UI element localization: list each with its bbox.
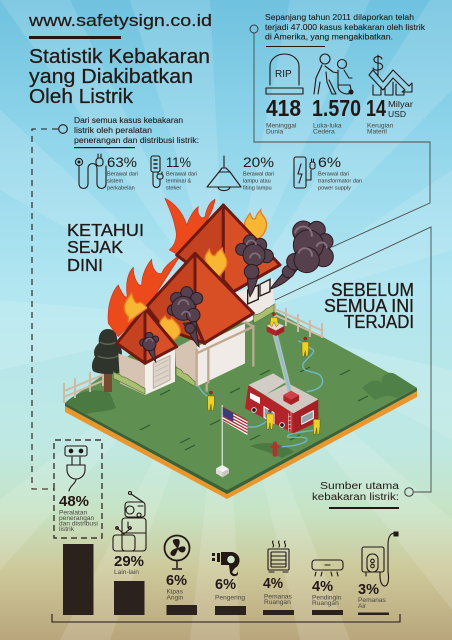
- stat: deaths: Meninggal: [266, 122, 297, 130]
- category 48% lighting: 48%: [59, 493, 89, 510]
- stat: deaths: 418: [266, 95, 301, 121]
- smoke on middle roof: [167, 287, 203, 347]
- category 29% others: Lain-lain: [114, 569, 139, 576]
- intro text: lighting and distribution: [74, 115, 199, 148]
- intro text: 2011 statistics: [265, 12, 426, 47]
- truck body: [245, 373, 318, 433]
- icon: air conditioner: [312, 560, 343, 576]
- fences: [64, 303, 323, 403]
- yellow flame on middle house: [160, 316, 180, 340]
- stat: financial loss: [366, 95, 413, 136]
- connector node: [250, 25, 258, 33]
- rear walls: [235, 278, 273, 323]
- intro text: 2011 statistics: Sepanjang tahun 2011 dilaporkan telah: [265, 12, 414, 22]
- hoses: [198, 341, 323, 447]
- main sources heading: Sumber utama: [320, 481, 400, 492]
- garage door: [153, 356, 170, 388]
- icon: hair dryer: [212, 552, 240, 576]
- stat: lamp 20%: [207, 154, 274, 192]
- isometric ground: [65, 310, 417, 499]
- smoke large right: [270, 221, 333, 289]
- title: yang Diakibatkan: [29, 66, 193, 88]
- title: Oleh Listrik: [29, 86, 134, 108]
- category 4% air conditioner: Ruangan: [312, 600, 339, 607]
- flag base: [216, 465, 229, 477]
- pergola: [197, 322, 253, 392]
- stat: wiring 63%: 63%: [107, 154, 137, 170]
- category 4% air conditioner: [312, 560, 343, 607]
- stat: terminal 11%: terminal &: [166, 178, 191, 184]
- stat: wiring 63%: [75, 154, 138, 192]
- smoke plumes: [140, 221, 333, 362]
- yellow flame back right: [245, 210, 267, 239]
- category 48% lighting: Peralatan: [59, 510, 88, 516]
- heading: before it happens: SEBELUM: [331, 279, 414, 300]
- stat: wiring 63%: Berawal dari: [107, 172, 138, 178]
- stat: transformer 6%: power supply: [318, 186, 351, 192]
- category 4% room heater: Ruangan: [264, 599, 291, 606]
- ladder base: [283, 391, 299, 405]
- category 6% fan: 6%: [166, 572, 187, 589]
- stat: financial loss: Kerugian: [367, 122, 394, 130]
- smoke on small roof: [140, 332, 159, 362]
- category 6% fan: [164, 536, 190, 602]
- category 4% room heater: [263, 541, 293, 606]
- category 48% lighting: listrik: [59, 526, 75, 533]
- house walls: [118, 353, 145, 395]
- stat: transformer 6%: [294, 154, 362, 192]
- category 6% hair dryer: Pengering: [215, 594, 245, 602]
- category 3% water heater: [358, 532, 398, 610]
- icon: heater: [268, 541, 289, 572]
- stat: transformer 6%: Berawal dari: [318, 172, 349, 178]
- icon: money loss: [369, 55, 412, 95]
- stat: wiring 63%: sistem: [107, 178, 124, 184]
- stat: deaths: Dunia: [266, 128, 284, 136]
- back flames: [108, 198, 215, 337]
- stat: financial loss: Materil: [367, 128, 387, 136]
- intro text: lighting and distribution: penerangan dan distribusi listrik:: [74, 135, 199, 145]
- dashed connector: [32, 125, 102, 538]
- category 6% fan: Angin: [166, 594, 184, 602]
- icon: tombstone: [266, 54, 303, 94]
- heading: before it happens: TERJADI: [344, 311, 414, 332]
- stat: financial loss: USD: [388, 110, 406, 119]
- rear roof: [177, 205, 280, 292]
- heading: before it happens: SEMUA INI: [324, 295, 414, 316]
- connector line: top right: [254, 33, 430, 247]
- stat: financial loss: 14: [366, 95, 386, 121]
- yellow flame left: [124, 293, 147, 322]
- category 3% water heater: Air: [358, 603, 367, 610]
- stat: injuries: [312, 95, 361, 136]
- yellow flame centre: [205, 248, 227, 277]
- icon: water heater: [362, 532, 398, 586]
- stat: transformer 6%: transformator dan: [318, 178, 362, 184]
- smoke upper centre: [236, 235, 273, 297]
- stat: injuries: Luka-luka: [313, 122, 342, 130]
- category 4% room heater: 4%: [263, 575, 283, 592]
- intro text: 2011 statistics: di Amerika, yang mengakibatkan.: [265, 32, 393, 42]
- heading underline: [29, 36, 121, 39]
- icon: plug and socket: [65, 446, 87, 491]
- icon: cable: [75, 154, 106, 188]
- intro text: lighting and distribution: listrik oleh peralatan: [74, 125, 152, 135]
- heading: know early: [67, 220, 144, 275]
- stat: injuries: 1.570: [312, 95, 361, 121]
- category 6% fan: Kipas: [166, 588, 184, 596]
- website url: www.safetysign.co.id: [28, 11, 212, 30]
- category 48% lighting: dan distribusi: [59, 520, 98, 528]
- bushes: [113, 304, 274, 394]
- flag pole: [222, 405, 223, 467]
- stat: lamp 20%: fiting lampu: [243, 186, 272, 192]
- category 48% lighting: penerangan: [59, 515, 95, 522]
- title: [29, 46, 210, 108]
- stat: wiring 63%: perkabelan: [107, 186, 135, 192]
- icon: caretaker and wheelchair: [314, 54, 353, 94]
- icon: radio fridge tv: [113, 492, 146, 551]
- ladder basket: [267, 322, 284, 336]
- main sources heading: kebakaran listrik:: [312, 492, 399, 503]
- heading: know early: KETAHUI: [67, 220, 144, 240]
- tree: [92, 329, 124, 392]
- category 4% air conditioner: Pendingin: [312, 594, 342, 602]
- connector line: right side: [275, 227, 431, 492]
- stat: deaths: [266, 95, 301, 136]
- heading: before it happens: [324, 279, 414, 332]
- category 4% air conditioner: 4%: [312, 578, 333, 595]
- category 3% water heater: Pemanas: [358, 597, 387, 604]
- icon: fan: [164, 536, 190, 569]
- heading: know early: SEJAK: [67, 237, 123, 257]
- stat: financial loss: Milyar: [388, 100, 413, 109]
- bar chart: [52, 544, 400, 622]
- stat: injuries: Cedera: [313, 128, 335, 136]
- icon: battery plug: [294, 157, 315, 188]
- category 6% hair dryer: 6%: [215, 576, 236, 593]
- heading: know early: DINI: [67, 255, 103, 275]
- firefighters: [208, 312, 320, 434]
- icon: socket: [151, 156, 163, 188]
- category 29% others: 29%: [114, 553, 144, 570]
- stat: terminal 11%: 11%: [166, 154, 191, 170]
- icon: tombstone: RIP: [275, 69, 292, 80]
- burning house: [108, 198, 333, 395]
- ladder: [273, 335, 293, 396]
- hydrant: [270, 441, 280, 457]
- stat: terminal 11%: Berawal dari: [166, 172, 197, 178]
- fire truck scene: [198, 312, 323, 477]
- stat: lamp 20%: 20%: [243, 154, 274, 170]
- sources connector node: [405, 488, 413, 496]
- small roof: [117, 308, 177, 363]
- stat: lamp 20%: Berawal dari: [243, 172, 274, 178]
- main sources heading: [312, 481, 400, 509]
- stat: terminal 11%: steker: [166, 186, 181, 192]
- stat: lamp 20%: lampu atau: [243, 178, 271, 184]
- category 29% others: [113, 492, 146, 576]
- category 4% room heater: Pemanas: [264, 594, 293, 600]
- category 6% hair dryer: [212, 552, 245, 602]
- middle roof: [147, 253, 253, 343]
- title: Statistik Kebakaran: [29, 46, 210, 68]
- american flag: [223, 407, 247, 435]
- stat: transformer 6%: 6%: [318, 154, 341, 170]
- intro text: lighting and distribution: Dari semua kasus kebakaran: [74, 115, 183, 125]
- icon: lamp: [207, 156, 241, 191]
- category 48% lighting: [59, 446, 98, 533]
- intro text: 2011 statistics: terjadi 47.000 kasus kebakaran oleh listrik: [265, 22, 426, 32]
- category 3% water heater: 3%: [358, 581, 379, 598]
- stat: terminal 11%: [151, 154, 197, 192]
